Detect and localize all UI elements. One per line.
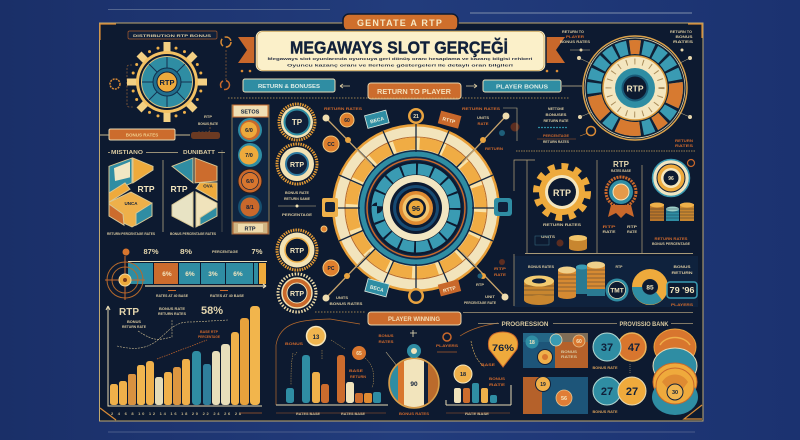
coin stacks row: BONUS xyxy=(674,264,691,269)
right of wheel notes: RETURN xyxy=(485,146,503,151)
wheel tag top right: RTTP xyxy=(442,116,456,126)
arrow xyxy=(340,84,350,88)
stacked discs xyxy=(652,329,698,415)
middle bars xyxy=(286,355,381,403)
gear note xyxy=(198,114,218,126)
section captions: RTP xyxy=(602,224,616,229)
left hexagon: UNCA xyxy=(125,201,137,206)
progression card 2: 19 xyxy=(540,382,546,388)
wheel tag bottom right: RTTP xyxy=(442,285,457,295)
main bar chart: PERCENTAGE xyxy=(198,334,220,339)
wheel top pin xyxy=(408,108,424,124)
player winning button: PLAYER WINNING xyxy=(388,317,440,323)
top decorative lines xyxy=(108,10,695,432)
main bar chart: BASE RTP xyxy=(200,329,218,334)
main bar chart: RETURN RATE xyxy=(122,324,146,329)
small progression chart: RATE BASE xyxy=(465,411,489,416)
small orange coins xyxy=(321,113,354,276)
percent strip xyxy=(105,248,267,300)
column of coins xyxy=(232,105,269,234)
strip cell: 6% xyxy=(162,271,172,278)
strip cell xyxy=(154,263,178,284)
wheel tag bottom right xyxy=(438,279,461,296)
central wheel: 96 xyxy=(412,204,420,213)
gear note: RTP xyxy=(204,114,212,119)
caption left: RETURN PERCENTAGE RATES xyxy=(107,231,155,236)
dual coins bottom: 27 xyxy=(601,386,613,398)
main bar chart: BONUS xyxy=(127,319,141,324)
wheel tag top right xyxy=(438,111,461,129)
coin stacks row: RTP xyxy=(494,266,506,271)
dual coins top: 37 xyxy=(601,342,613,354)
middle bar chart xyxy=(276,319,397,416)
medallion right: 96 xyxy=(668,176,674,182)
medallion captions xyxy=(278,190,316,217)
stack 3 xyxy=(576,264,588,294)
right hexagon: RTP xyxy=(171,185,188,194)
badge xyxy=(606,278,628,302)
dual coins bottom xyxy=(592,377,646,414)
RTP gear section xyxy=(514,160,694,254)
note: RETURN RATES xyxy=(324,106,362,111)
corner ornaments xyxy=(100,24,702,420)
subtitle: Oyuncu kazanç oranı ve ilerleme göstergeleri ile detaylı oran bilgileri xyxy=(287,64,513,68)
strip cell: 6% xyxy=(233,271,243,278)
right wheel notes xyxy=(560,29,693,148)
disc coin: 30 xyxy=(672,390,678,396)
medallion TP: TP xyxy=(292,118,303,127)
player winning button xyxy=(368,312,461,325)
dark bar xyxy=(191,132,220,139)
percent strip: RATES AT 40 BASE xyxy=(210,293,244,298)
donut chart: 85 xyxy=(646,284,654,292)
strip cell xyxy=(226,263,253,284)
center button: return to player xyxy=(368,83,461,99)
progression header: PROGRESSION xyxy=(502,322,548,328)
small progression chart: BONUS xyxy=(489,376,505,381)
progression header xyxy=(478,322,617,328)
right wheel notes: RETURN xyxy=(675,138,693,143)
medallion captions: PERCENTAGE xyxy=(282,212,312,217)
medallion RTP 1 xyxy=(277,144,317,184)
left hexagon: RTP xyxy=(138,185,155,194)
wheel connectors xyxy=(326,116,506,298)
middle bar chart: RATES xyxy=(378,339,394,344)
coin 1: 6/0 xyxy=(245,128,253,134)
right wheel notes: RATES xyxy=(675,143,693,148)
subtitle xyxy=(268,57,532,68)
progression card 1: 60 xyxy=(576,339,582,345)
percent strip: PERCENTAGE xyxy=(212,249,238,254)
coin stacks xyxy=(650,202,694,221)
medallion RTP 3: RTP xyxy=(290,291,304,298)
percent strip: 8% xyxy=(180,249,193,256)
center button: return to player: RETURN TO PLAYER xyxy=(377,89,451,96)
strip cell: 3% xyxy=(208,271,218,278)
strip cell xyxy=(201,263,225,284)
coin stacks row: BONUS RATES xyxy=(528,264,554,269)
central wheel xyxy=(322,108,512,304)
medallion RTP 1: RTP xyxy=(290,162,304,169)
right of wheel notes: RETURN RATE xyxy=(544,118,569,123)
orange gear xyxy=(537,167,587,217)
wheel tag top left xyxy=(365,110,389,128)
small stack xyxy=(569,235,587,251)
rosette xyxy=(606,177,636,218)
coin stacks row: RETURN xyxy=(672,270,693,275)
chart coin 1: 13 xyxy=(313,335,320,341)
section captions xyxy=(535,222,690,246)
medallion captions: BONUS RATE xyxy=(285,190,309,195)
dual coins top xyxy=(592,333,646,374)
subtitle: Megaways slot oyunlarında oyuncuya geri dönüş oranı hesaplama ve kazanç bilgisi rehberi xyxy=(268,57,532,61)
right of wheel notes: RETURN RATES xyxy=(462,106,500,111)
right wheel notes: RETURN TO xyxy=(562,29,584,34)
orange button: BONUS RATES xyxy=(126,132,158,138)
stack 2 xyxy=(558,266,576,299)
medallion TP xyxy=(279,104,315,140)
value box xyxy=(667,282,697,298)
center ball: 90 xyxy=(410,381,418,388)
gear note: BONUS RATE xyxy=(198,121,218,126)
wheel bottom pin xyxy=(408,288,424,304)
coin 3: 6/0 xyxy=(246,179,254,185)
note bottom left xyxy=(330,295,363,306)
middle bar chart: BONUS xyxy=(378,333,394,338)
progression card 1: 18 xyxy=(529,340,535,346)
title box xyxy=(255,30,546,72)
right of wheel notes: METTONE xyxy=(548,106,564,111)
medallion RTP 2 xyxy=(277,230,317,270)
coin stacks row xyxy=(464,254,698,307)
strip cell xyxy=(179,263,200,284)
progression card 1 xyxy=(523,333,588,368)
text: PLAYER BONUS xyxy=(496,84,549,90)
section captions: UNITS xyxy=(541,234,555,239)
medallion RTP 2: RTP xyxy=(290,248,304,255)
coin stacks row: RTP xyxy=(476,282,484,287)
coin 2: 7/0 xyxy=(245,153,253,159)
rtp heading xyxy=(611,160,631,173)
middle bar chart: RETURN xyxy=(350,374,366,379)
pin 76%: 76% xyxy=(492,343,515,354)
right hexagon xyxy=(171,158,217,227)
coin: 18 xyxy=(460,372,466,378)
coin 4: 8/1 xyxy=(246,205,254,211)
title: MEGAWAYS SLOT GERÇEĞİ xyxy=(290,36,508,58)
rtp heading: RATES BASE xyxy=(611,168,631,173)
bars xyxy=(110,306,260,405)
gear: RTP xyxy=(160,78,174,87)
percent strip: 7% xyxy=(252,249,263,256)
main panel xyxy=(100,23,703,421)
medallion right xyxy=(652,160,690,196)
provision header: PROVISSIO BANK xyxy=(620,322,669,328)
right wheel xyxy=(583,36,687,140)
gear label: DISTRIBUTION RTP BONUS xyxy=(133,33,211,38)
caption right: BONUS PERCENTAGE RATES xyxy=(170,231,216,236)
axis labels: 2 4 6 8 10 12 14 16 18 20 22 24 26 28 xyxy=(111,411,242,416)
coin stacks row: RATE xyxy=(494,272,506,277)
dual coins bottom: BONUS RATE xyxy=(592,409,618,414)
header right: DUNIBATT xyxy=(183,150,215,156)
chart value: 58% xyxy=(201,305,223,317)
donut chart xyxy=(632,274,663,305)
coin stacks row: UNIT xyxy=(485,294,496,299)
main bar chart: RETURN RATES xyxy=(158,311,186,316)
right of wheel notes: RATE xyxy=(478,121,489,126)
coin stacks row: PERCENTAGE RATE xyxy=(464,300,496,305)
note bottom left: BONUS RATES xyxy=(330,301,363,306)
main bar chart xyxy=(106,305,262,416)
bars xyxy=(454,383,497,403)
stack 4 xyxy=(587,262,605,296)
wheel tag bottom left xyxy=(365,279,389,297)
small progression chart: PLAYERS xyxy=(436,343,458,348)
percent strip: 87% xyxy=(144,249,159,256)
right wheel notes: BONUS RATES xyxy=(560,39,590,44)
right of wheel notes: RETURN RATES xyxy=(543,139,569,144)
wheel top pin: 21 xyxy=(413,114,419,120)
section captions: RATE xyxy=(627,229,637,234)
wheel side left xyxy=(322,198,338,217)
medallion captions: RETURN SAME xyxy=(284,196,310,201)
wheel tag bottom left: BECA xyxy=(369,284,385,294)
chart coin 2: 65 xyxy=(356,351,362,357)
wheel tag top left: BECA xyxy=(370,116,385,125)
percent strip: RATES AT 40 BASE xyxy=(156,293,188,298)
coin stacks row: RTP xyxy=(616,264,623,269)
badge: TMT xyxy=(610,288,624,294)
dual coins bottom: 27 xyxy=(626,386,638,398)
ribbon dots xyxy=(241,70,558,72)
middle bar chart: BASE xyxy=(349,368,363,373)
section captions: RTP xyxy=(627,224,637,229)
wheel side right xyxy=(494,198,512,216)
right of wheel notes: PERCENTAGE xyxy=(543,133,569,138)
progression card 2 xyxy=(523,376,588,414)
middle bar chart: RATES BASE xyxy=(341,411,365,416)
small progression chart: RATE xyxy=(489,382,505,387)
center ball xyxy=(389,330,440,416)
right wheel notes: BONUS xyxy=(676,34,693,39)
value box: 79 '96 xyxy=(670,286,695,295)
progression card 2: 56 xyxy=(561,396,567,402)
rtp heading: RTP xyxy=(613,160,630,169)
right wheel notes: RETURN TO xyxy=(670,29,692,34)
right of wheel notes xyxy=(462,106,596,151)
ribbon left xyxy=(238,37,258,63)
stack 1 xyxy=(524,276,554,305)
right of wheel notes: UNITS xyxy=(477,115,489,120)
left gear panel xyxy=(100,31,231,140)
right wheel notes: PLAYER xyxy=(566,34,584,39)
chart label: RTP xyxy=(119,307,139,318)
dual coins top: 47 xyxy=(628,342,640,354)
text: CC xyxy=(327,142,335,148)
section captions: BONUS PERCENTAGE xyxy=(652,241,690,246)
right wheel notes: RATES xyxy=(673,39,693,44)
section captions: RATE xyxy=(602,229,616,234)
middle bar chart: RATES BASE xyxy=(296,411,320,416)
column head: SETOS xyxy=(241,110,260,116)
right of wheel notes: BONUSES xyxy=(546,112,567,117)
left hexagon xyxy=(109,158,155,227)
ribbon right xyxy=(545,37,565,63)
right hexagon: OVA xyxy=(203,184,213,188)
center ball: BONUS RATES xyxy=(399,411,429,416)
header left: MISTIANO xyxy=(111,150,143,156)
text: 60 xyxy=(344,118,350,124)
small progression chart xyxy=(436,323,511,416)
target icon xyxy=(105,248,145,300)
right wheel: RTP xyxy=(626,84,644,94)
section captions: RETURN RATES xyxy=(543,222,581,227)
section captions: RETURN RATES xyxy=(654,236,688,241)
orange gear: RTP xyxy=(553,188,571,198)
top tab xyxy=(343,14,458,31)
dual coins top: BONUS RATE xyxy=(592,365,618,370)
progression card 1: RATES xyxy=(561,354,577,359)
hexagon section xyxy=(107,150,225,236)
top tab: GENTATE A RTP xyxy=(357,18,443,28)
column foot: RTP xyxy=(244,226,256,232)
top buttons: RETURN & BONUSES xyxy=(258,84,321,90)
progression card 1: BONUS xyxy=(561,349,577,354)
pin 76% xyxy=(488,332,518,367)
medallion RTP 3 xyxy=(278,274,316,312)
main bar chart: BONUS RATE xyxy=(159,306,185,311)
spokes xyxy=(332,124,500,292)
top buttons xyxy=(243,79,335,92)
small progression chart: BASE xyxy=(481,362,495,367)
text: PC xyxy=(328,266,335,272)
middle bar chart: BONUS xyxy=(285,341,303,346)
arrow xyxy=(466,84,477,88)
note bottom left: UNITS xyxy=(336,295,348,300)
strip cell: 6% xyxy=(185,271,195,278)
coin stacks row: PLAYERS xyxy=(671,302,693,307)
